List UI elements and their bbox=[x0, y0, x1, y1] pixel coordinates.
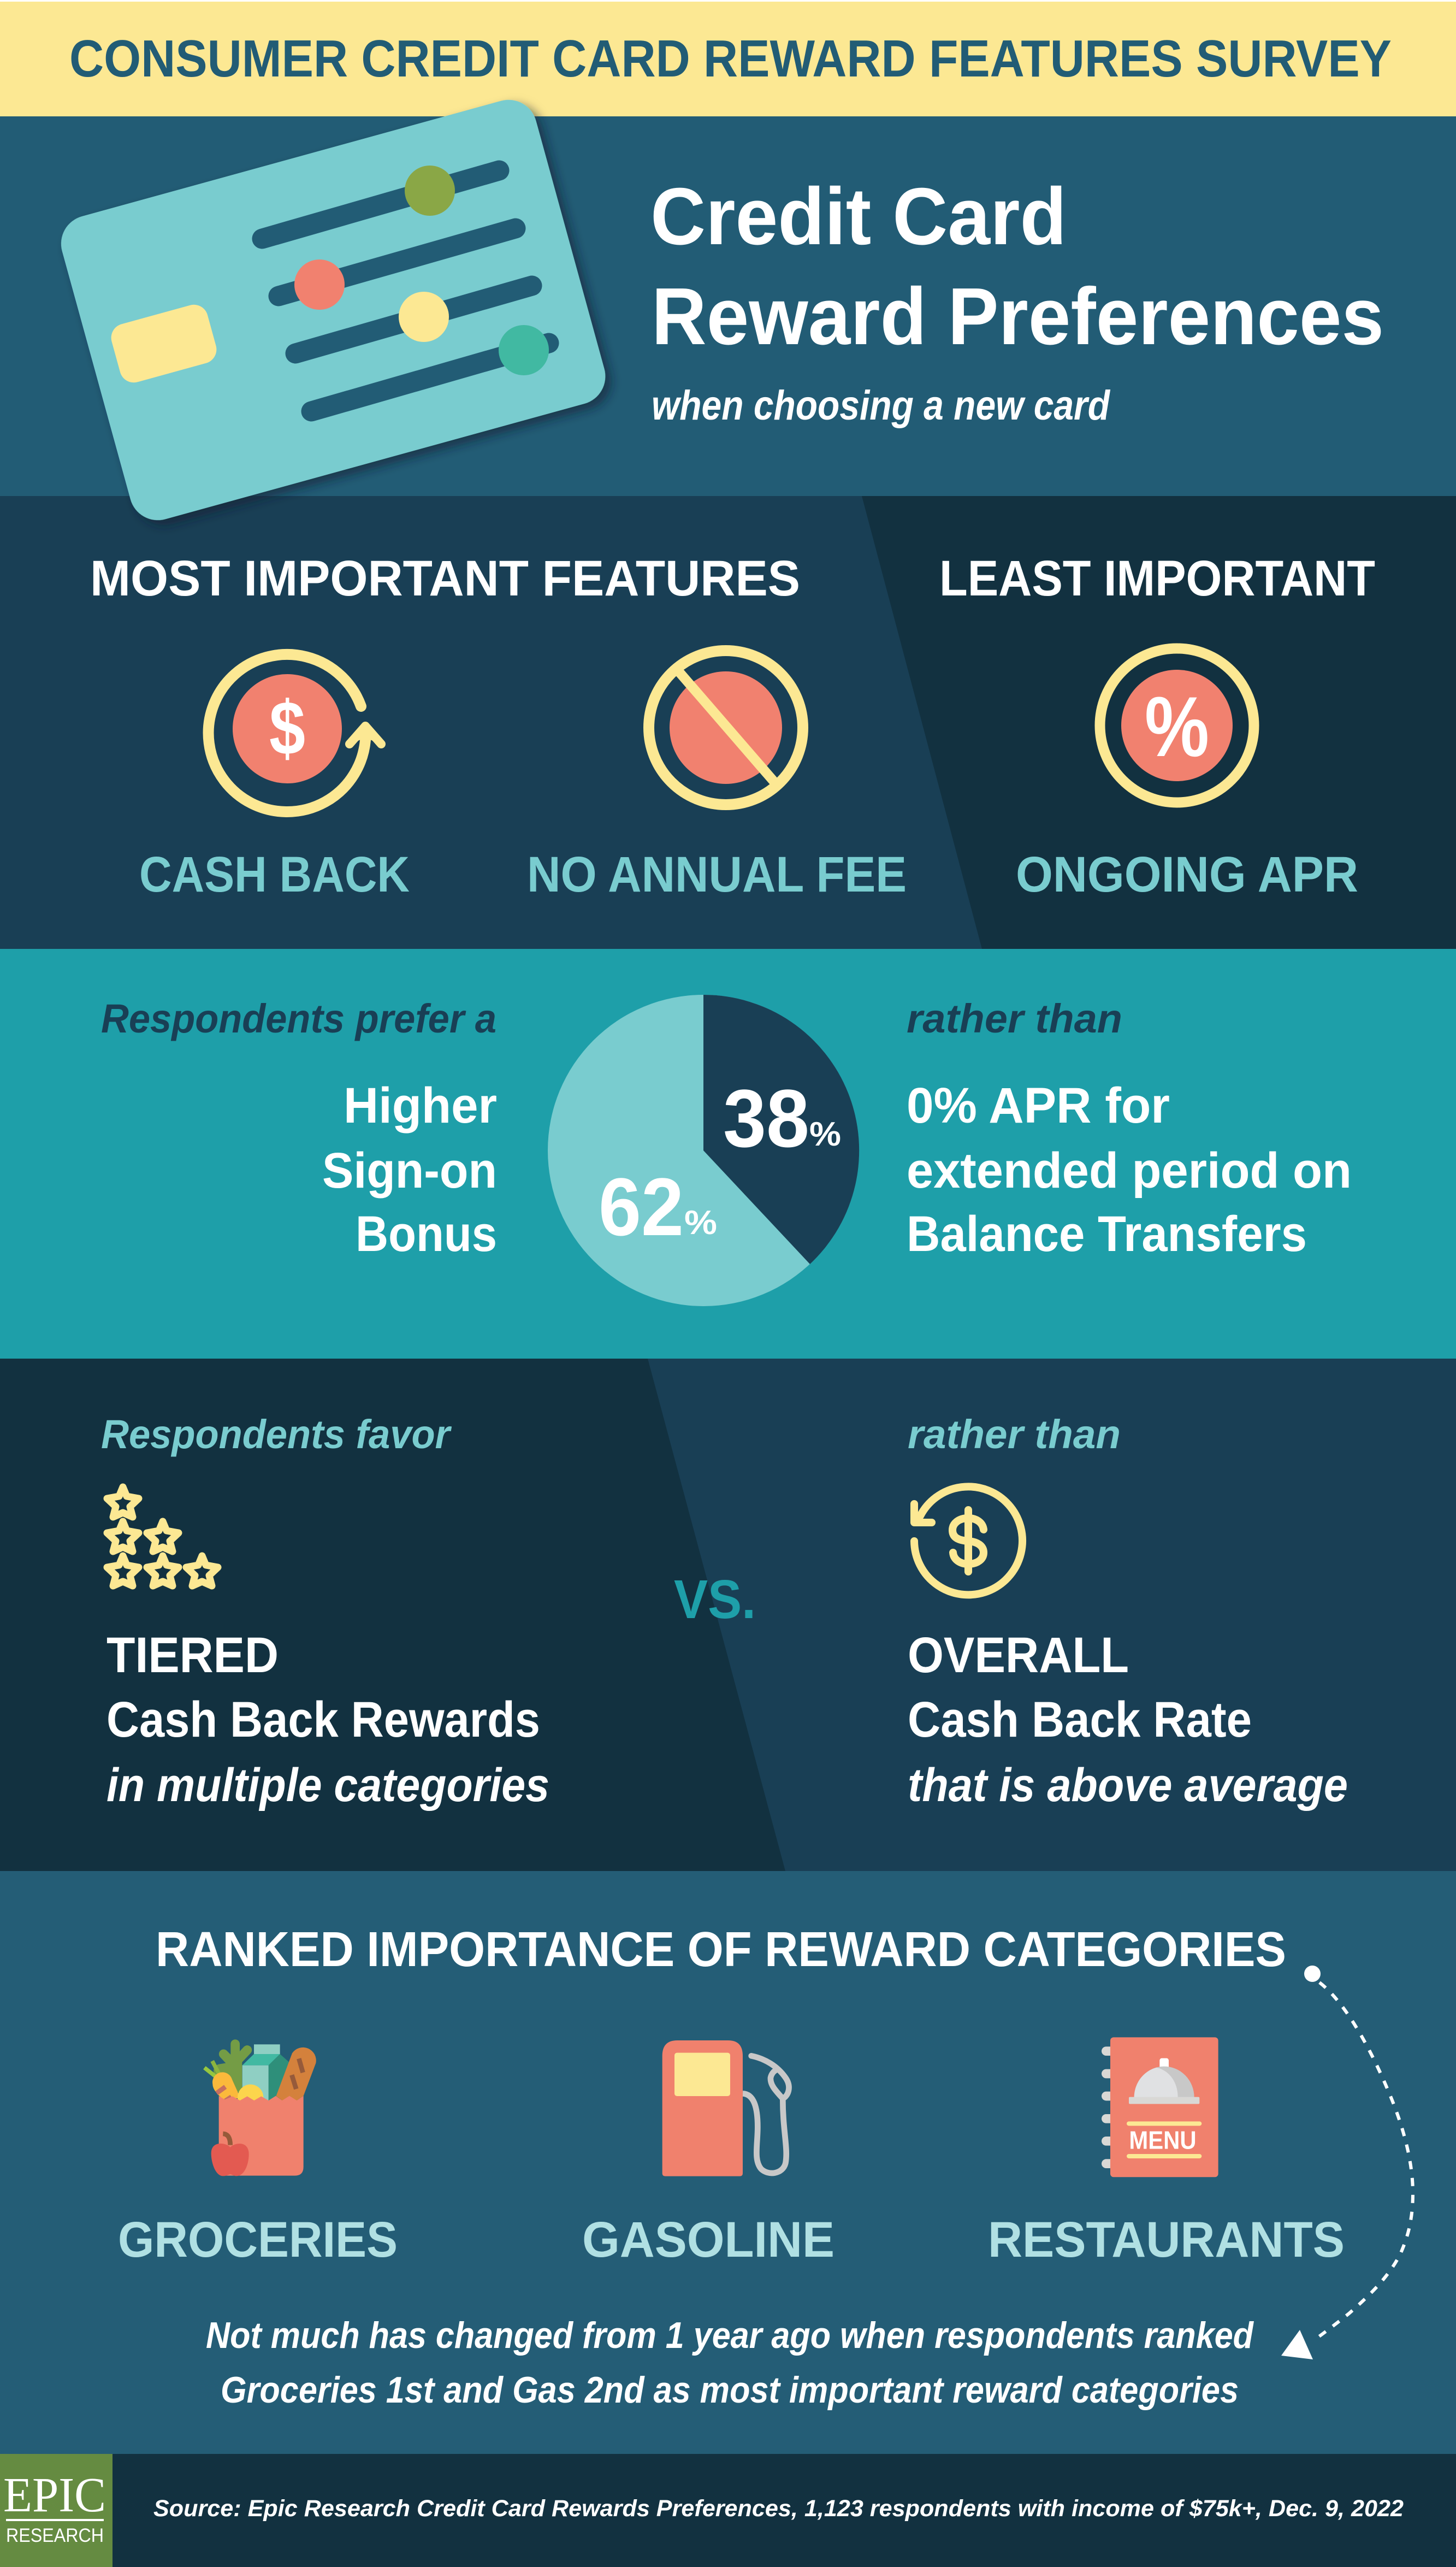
heading: ranked importance: RANKED IMPORTANCE OF REWARD CATEGORIES bbox=[156, 1922, 1286, 1977]
footer bbox=[0, 2454, 1456, 2567]
icon: cash back: $ bbox=[269, 685, 305, 771]
text: higher sign-on bonus: Higher bbox=[344, 1078, 497, 1134]
icon: ongoing apr: % bbox=[1145, 680, 1209, 775]
text: overall cash back rate: Cash Back Rate bbox=[908, 1692, 1252, 1748]
note: change from one year ago: Groceries 1st and Gas 2nd as most important reward categories bbox=[221, 2369, 1239, 2411]
icon: credit card with sliders bbox=[55, 93, 612, 527]
main title bbox=[650, 172, 1384, 362]
icon: six stars bbox=[107, 1487, 218, 1586]
note: change from one year ago: Not much has changed from 1 year ago when respondents ranked bbox=[206, 2315, 1254, 2356]
text: 0% apr for extended period on balance transfers bbox=[907, 1078, 1352, 1262]
panel: sign-on bonus vs 0% apr bbox=[0, 949, 1456, 1359]
label: restaurants: RESTAURANTS bbox=[988, 2212, 1345, 2268]
icon: restaurant menu bbox=[1102, 2037, 1218, 2177]
vs label: VS. bbox=[674, 1569, 756, 1630]
label: gasoline: GASOLINE bbox=[582, 2212, 834, 2268]
label: cash back: CASH BACK bbox=[139, 847, 410, 902]
header banner bbox=[0, 0, 1456, 116]
note: change from one year ago bbox=[206, 2315, 1254, 2411]
text: 0% apr for extended period on balance transfers: Balance Transfers bbox=[907, 1206, 1307, 1262]
label: no annual fee: NO ANNUAL FEE bbox=[527, 847, 907, 902]
text: overall cash back rate bbox=[908, 1627, 1348, 1811]
panel: tiered vs overall cash back bbox=[0, 1359, 1456, 1871]
logo: epic research: EPIC bbox=[3, 2468, 106, 2522]
arrow: dashed curve from heading to note bbox=[1281, 1966, 1413, 2359]
text: overall cash back rate: OVERALL bbox=[908, 1627, 1129, 1683]
icon: grocery bag bbox=[204, 2039, 316, 2176]
pie chart: % bbox=[684, 1204, 717, 1242]
text: higher sign-on bonus: Bonus bbox=[356, 1206, 497, 1262]
panel: ranked importance bbox=[0, 1871, 1456, 2454]
icon: restaurant menu: MENU bbox=[1129, 2126, 1197, 2154]
heading: least important: LEAST IMPORTANT bbox=[939, 551, 1375, 606]
logo: epic research: RESEARCH bbox=[6, 2525, 104, 2546]
text: respondents prefer a: Respondents prefer a bbox=[101, 996, 496, 1041]
pie chart: 62 bbox=[599, 1161, 684, 1253]
main title: Reward Preferences bbox=[652, 272, 1384, 362]
icon: ongoing apr bbox=[1100, 648, 1254, 802]
heading: most important features: MOST IMPORTANT FEATURES bbox=[90, 551, 800, 606]
text: tiered cash back rewards: in multiple categories bbox=[106, 1759, 549, 1811]
text: higher sign-on bonus: Sign-on bbox=[322, 1143, 497, 1199]
subtitle: when choosing a new card bbox=[652, 382, 1110, 429]
text: 0% apr for extended period on balance transfers: 0% APR for bbox=[907, 1078, 1170, 1134]
source line: Source: Epic Research Credit Card Rewards Preferences, 1,123 respondents with income of $75k+, Dec. 9, 2022 bbox=[153, 2495, 1404, 2522]
logo: epic research bbox=[0, 2454, 113, 2567]
panel: most and least important features bbox=[0, 496, 1456, 949]
icon: no annual fee bbox=[649, 651, 803, 805]
text: overall cash back rate: that is above average bbox=[908, 1759, 1348, 1811]
icon: cash back bbox=[209, 654, 382, 812]
text: rather than: rather than bbox=[908, 1412, 1121, 1457]
panel: hero bbox=[0, 93, 1456, 527]
pie chart bbox=[548, 995, 859, 1306]
text: tiered cash back rewards: TIERED bbox=[106, 1627, 279, 1683]
label: groceries: GROCERIES bbox=[118, 2212, 398, 2268]
main title: Credit Card bbox=[650, 172, 1067, 262]
text: respondents favor: Respondents favor bbox=[101, 1412, 452, 1457]
text: higher sign-on bonus bbox=[322, 1078, 497, 1262]
text: tiered cash back rewards: Cash Back Rewards bbox=[106, 1692, 540, 1748]
icon: gas pump bbox=[662, 2040, 789, 2176]
pie chart: % bbox=[809, 1116, 841, 1153]
icon: dollar with return arrow bbox=[914, 1486, 1022, 1595]
pie chart: 38 bbox=[723, 1072, 809, 1164]
label: ongoing apr: ONGOING APR bbox=[1016, 847, 1358, 902]
text: rather than: rather than bbox=[907, 996, 1122, 1041]
text: tiered cash back rewards bbox=[106, 1627, 549, 1811]
text: 0% apr for extended period on balance transfers: extended period on bbox=[907, 1143, 1352, 1199]
